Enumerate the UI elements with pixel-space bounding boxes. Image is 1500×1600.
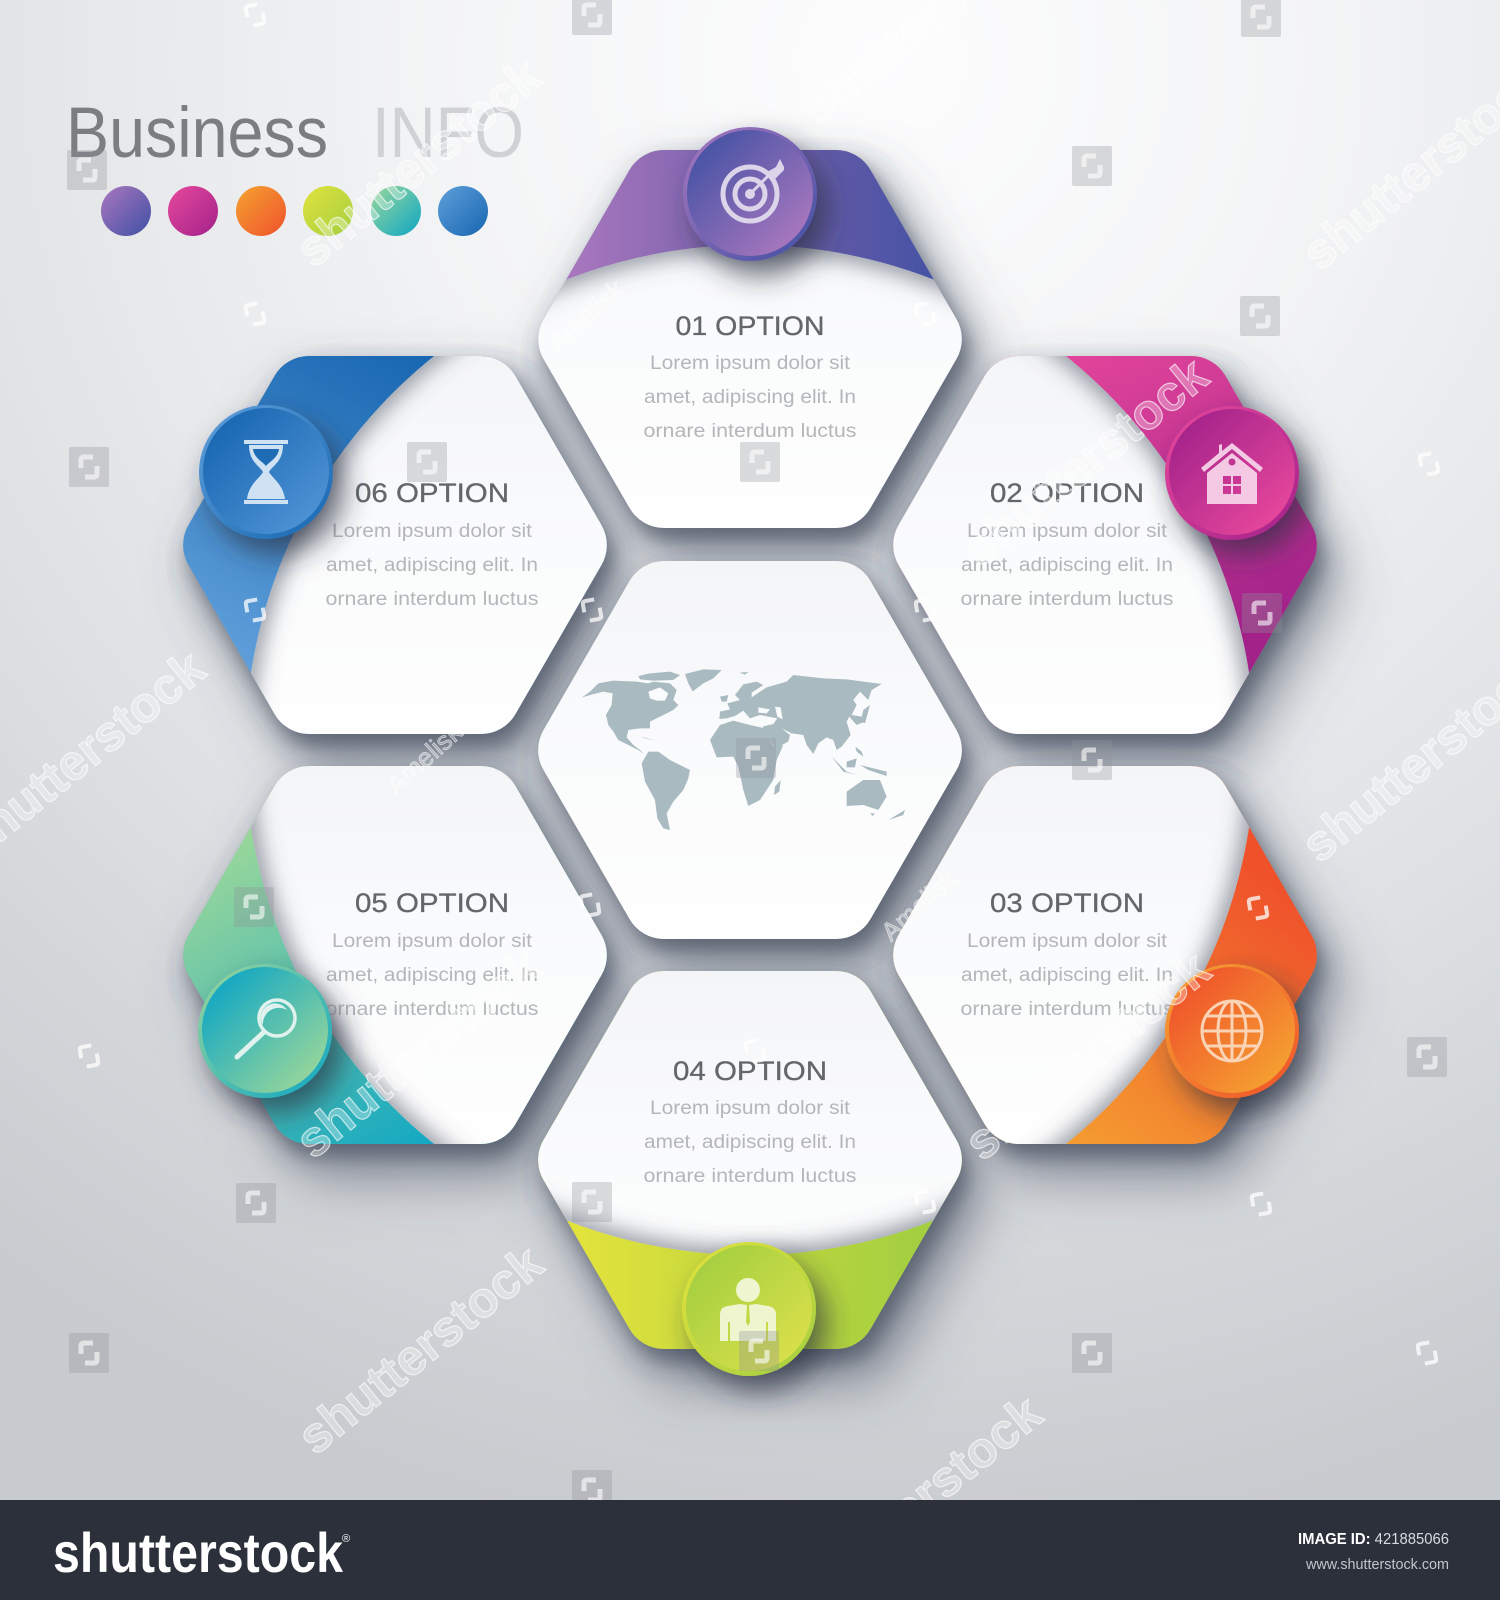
icon: magnifier [198,964,332,1098]
panel: 03 option: amet, adipiscing elit. In [961,965,1173,986]
hexagon shadows [183,150,1317,1349]
panel: 03 option: 03 OPTION [990,888,1144,918]
watermark overlay: shutterstock [285,47,551,278]
footer image id: IMAGE ID: 421885066 [1298,1531,1449,1548]
world map [582,669,905,830]
panel: 06 option [326,478,538,610]
panel: 03 option: ornare interdum luctus [960,999,1174,1020]
panel: 05 option: ornare interdum luctus [326,999,538,1020]
panel: 06 option: 06 OPTION [355,478,509,508]
watermark overlay: shutterstock [952,346,1218,577]
watermark overlay: Amelisk [875,863,964,947]
panel: 02 option: amet, adipiscing elit. In [961,555,1173,576]
panel: 04 option [644,1056,856,1187]
icon: person [682,1242,816,1376]
panel: 05 option [326,888,538,1020]
panel: 02 option [960,478,1174,610]
panel: 01 option: 01 OPTION [676,311,824,341]
panel: 04 option: amet, adipiscing elit. In [644,1132,856,1153]
title: INFO [372,94,524,173]
footer url: www.shutterstock.com [1305,1556,1449,1573]
panel: 04 option: Lorem ipsum dolor sit [650,1098,851,1119]
colour dots legend [101,186,488,236]
watermark overlay: Amelisk [380,716,469,800]
title: Business [66,94,328,173]
panel: 05 option: amet, adipiscing elit. In [326,965,538,986]
panel: 02 option: 02 OPTION [990,478,1144,508]
icon: hourglass [199,405,333,539]
panel: 01 option: Lorem ipsum dolor sit [650,353,851,374]
panel: 03 option: Lorem ipsum dolor sit [967,931,1168,952]
colour bands behind hexagons [183,150,1317,1349]
panel: 03 option [960,888,1174,1020]
panel: 01 option: amet, adipiscing elit. In [644,387,856,408]
panel: 01 option: ornare interdum luctus [644,421,856,442]
watermark overlay: shutterstock [287,1234,553,1465]
icon: target [683,127,817,261]
panel: 06 option: Lorem ipsum dolor sit [332,521,533,542]
watermark overlay: shutterstock [285,938,551,1169]
panel: 04 option: 04 OPTION [673,1056,827,1086]
title [66,94,524,173]
panel: 06 option: amet, adipiscing elit. In [326,555,538,576]
footer bar [0,1500,1500,1600]
panel: 02 option: Lorem ipsum dolor sit [967,521,1168,542]
footer registered mark: ® [342,1533,350,1545]
panel: 05 option: Lorem ipsum dolor sit [332,931,533,952]
panel: 05 option: 05 OPTION [355,888,509,918]
footer logo: shutterstock [53,1521,344,1584]
panel: 02 option: ornare interdum luctus [960,589,1174,610]
panel: 01 option [644,311,856,442]
watermark overlay: Amelisk [542,273,631,357]
icon: house [1165,406,1299,540]
watermark overlay: shutterstock [954,940,1220,1171]
white hexagon panels [183,150,1317,1349]
panel: 04 option: ornare interdum luctus [644,1166,856,1187]
panel: 06 option: ornare interdum luctus [326,589,538,610]
icon: globe [1165,964,1299,1098]
